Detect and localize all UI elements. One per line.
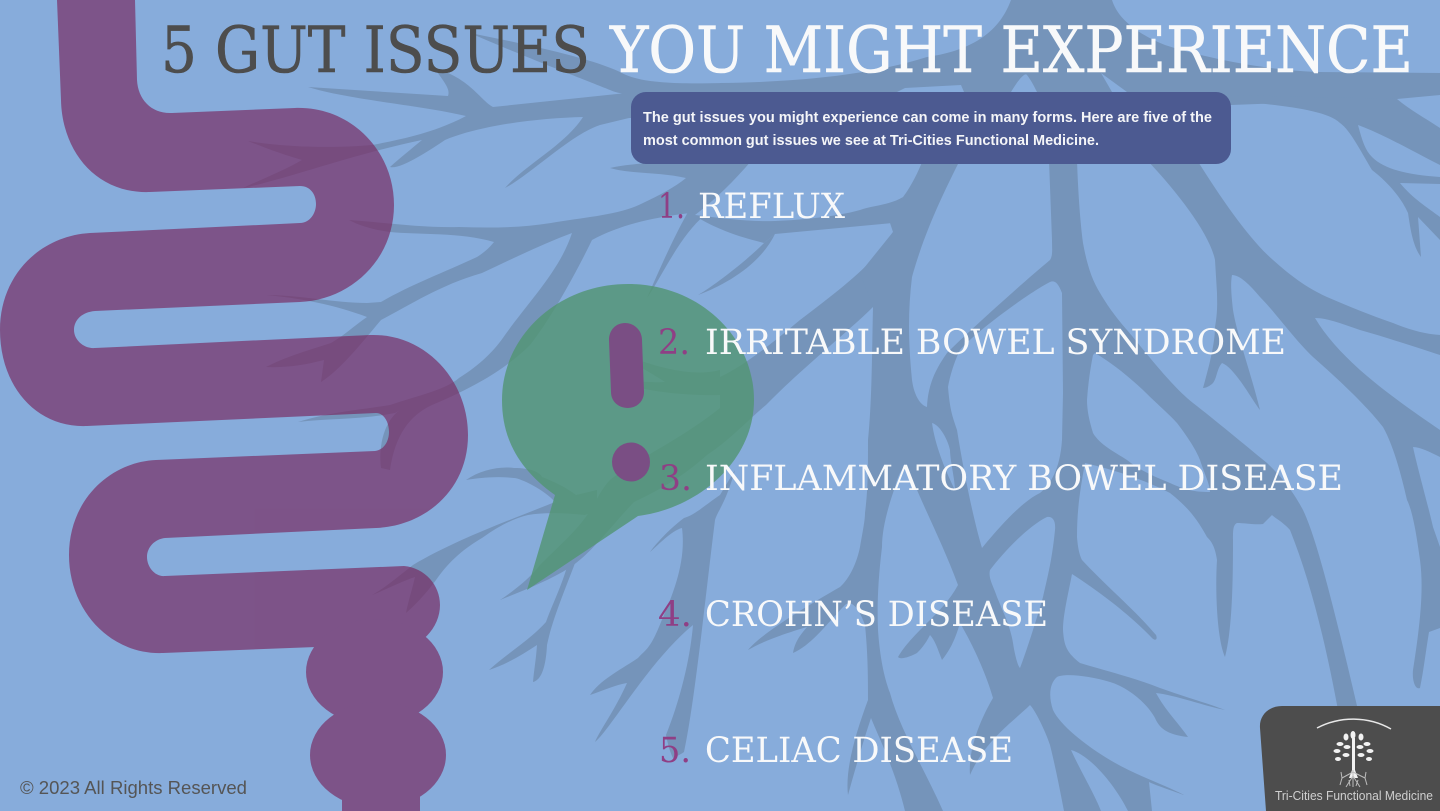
item 3: inflammatory bowel disease: 3. xyxy=(659,459,692,499)
logo tree icon xyxy=(1334,731,1374,778)
logo roots xyxy=(1340,770,1367,787)
title: 5 GUT ISSUES xyxy=(161,14,590,88)
illustration: purple intestine xyxy=(0,0,468,811)
item 3: inflammatory bowel disease: INFLAMMATORY BOWEL DISEASE xyxy=(705,459,1343,499)
item 5: celiac disease: CELIAC DISEASE xyxy=(705,731,1013,771)
list of gut issues xyxy=(658,187,1343,771)
item 2: irritable bowel syndrome: IRRITABLE BOWEL SYNDROME xyxy=(705,323,1286,363)
item 5: celiac disease: 5. xyxy=(659,731,691,771)
icon: exclamation mark xyxy=(609,323,650,482)
illustration: green speech bubble xyxy=(502,284,754,590)
logo arc xyxy=(1317,719,1391,729)
item 1: reflux: 1. xyxy=(658,187,685,227)
intro text box xyxy=(631,92,1231,164)
title xyxy=(161,14,1413,88)
item 4: crohn's disease: 4. xyxy=(658,595,692,635)
logo panel xyxy=(1260,706,1440,811)
item 4: crohn's disease: CROHN’S DISEASE xyxy=(705,595,1048,635)
intro text box: most common gut issues we see at Tri-Cities Functional Medicine. xyxy=(643,133,1099,149)
copyright notice: © 2023 All Rights Reserved xyxy=(20,778,247,798)
item 1: reflux: REFLUX xyxy=(698,187,845,227)
item 2: irritable bowel syndrome: 2. xyxy=(658,323,690,363)
intro text box: The gut issues you might experience can come in many forms. Here are five of the xyxy=(643,110,1212,126)
